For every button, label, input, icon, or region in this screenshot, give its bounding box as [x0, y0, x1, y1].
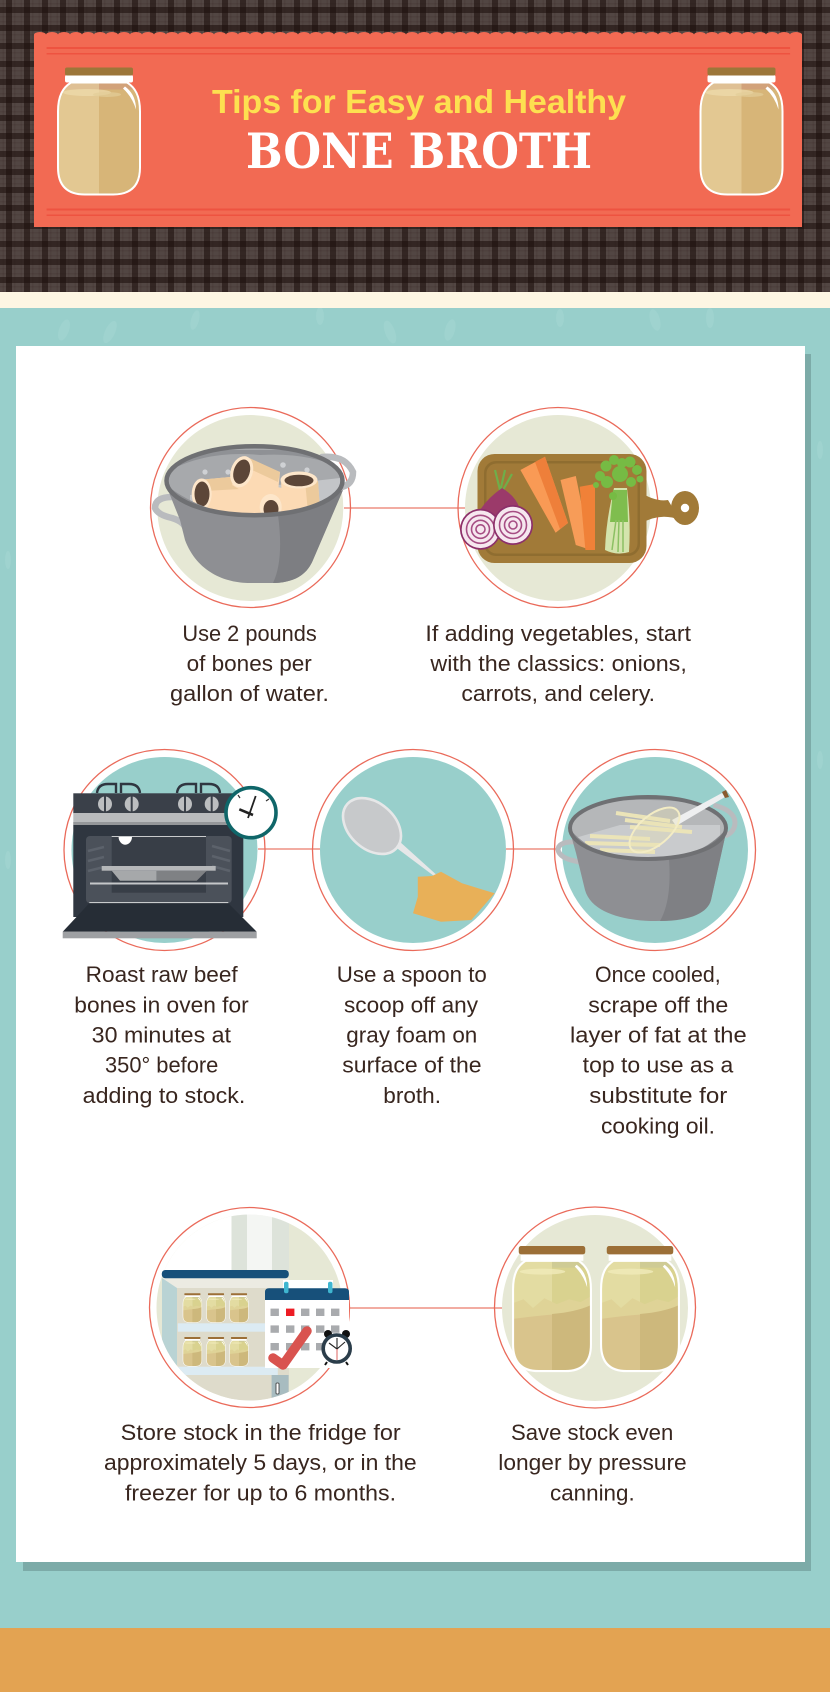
- orange footer band: [0, 1628, 830, 1692]
- connector: row 2 right: [506, 848, 557, 850]
- step 4: spoon and hand: [312, 750, 514, 950]
- step 5 text: top to use as a: [583, 1053, 734, 1078]
- step 2 text: with the classics: onions,: [429, 651, 687, 676]
- cream stripe: [0, 292, 830, 308]
- step 5 text: substitute for: [589, 1083, 727, 1108]
- step 2 text: carrots, and celery.: [461, 681, 655, 706]
- icon: left jar: [58, 68, 140, 194]
- step 3 text: adding to stock.: [83, 1083, 245, 1108]
- step 6 text: [104, 1420, 417, 1506]
- title: BONE BROTH: [246, 122, 592, 180]
- icon: right jar: [700, 68, 782, 194]
- step 2 text: [425, 621, 691, 706]
- step 5 text: layer of fat at the: [570, 1022, 747, 1047]
- step 5 text: [570, 962, 747, 1138]
- step 5: pot with fat being skimmed: [554, 750, 756, 950]
- step 1 text: Use 2 pounds: [182, 621, 317, 646]
- step 3 text: 30 minutes at: [92, 1022, 231, 1047]
- step 4 text: Use a spoon to: [337, 962, 487, 987]
- step 4 text: surface of the: [342, 1053, 482, 1078]
- step 3: oven with clock: [63, 750, 276, 950]
- step 6 text: freezer for up to 6 months.: [125, 1480, 396, 1506]
- banner: [34, 32, 802, 227]
- step 5 text: scrape off the: [588, 992, 728, 1017]
- title: [212, 83, 627, 180]
- step 7 text: canning.: [550, 1480, 635, 1506]
- step 7 text: [498, 1420, 687, 1506]
- step 4 text: gray foam on: [346, 1022, 477, 1047]
- step 6 text: Store stock in the fridge for: [121, 1420, 401, 1445]
- connector: row 2 left: [258, 848, 320, 850]
- step 4 text: broth.: [383, 1083, 441, 1108]
- step 3 text: [74, 962, 249, 1108]
- step 4 text: [337, 962, 487, 1108]
- step 3 text: Roast raw beef: [86, 962, 239, 987]
- step 1: pot with bones: [150, 408, 353, 608]
- title: Tips for Easy and Healthy: [212, 83, 627, 120]
- step 3 text: 350° before: [105, 1053, 218, 1078]
- teal background: [0, 308, 830, 1628]
- plaid header background: [0, 0, 830, 292]
- background leaf pattern: [5, 307, 823, 869]
- step 5 text: Once cooled,: [595, 962, 721, 987]
- step 3 text: bones in oven for: [74, 992, 249, 1017]
- connector: row 1: [344, 507, 465, 509]
- step 1 text: [170, 621, 329, 706]
- step 2: cutting board with vegetables: [458, 408, 699, 608]
- connector: row 3: [344, 1307, 502, 1309]
- panel: white card: [16, 346, 811, 1571]
- step 1 text: of bones per: [187, 651, 312, 676]
- step 6: fridge with calendar: [150, 1208, 350, 1408]
- step 7 text: longer by pressure: [498, 1450, 687, 1475]
- step 7 text: Save stock even: [511, 1420, 673, 1445]
- step 4 text: scoop off any: [344, 992, 478, 1017]
- step 5 text: cooking oil.: [601, 1113, 715, 1138]
- step 1 text: gallon of water.: [170, 681, 329, 706]
- step 7: two jars for canning: [494, 1207, 696, 1408]
- step 6 text: approximately 5 days, or in the: [104, 1450, 417, 1475]
- step 2 text: If adding vegetables, start: [425, 621, 691, 646]
